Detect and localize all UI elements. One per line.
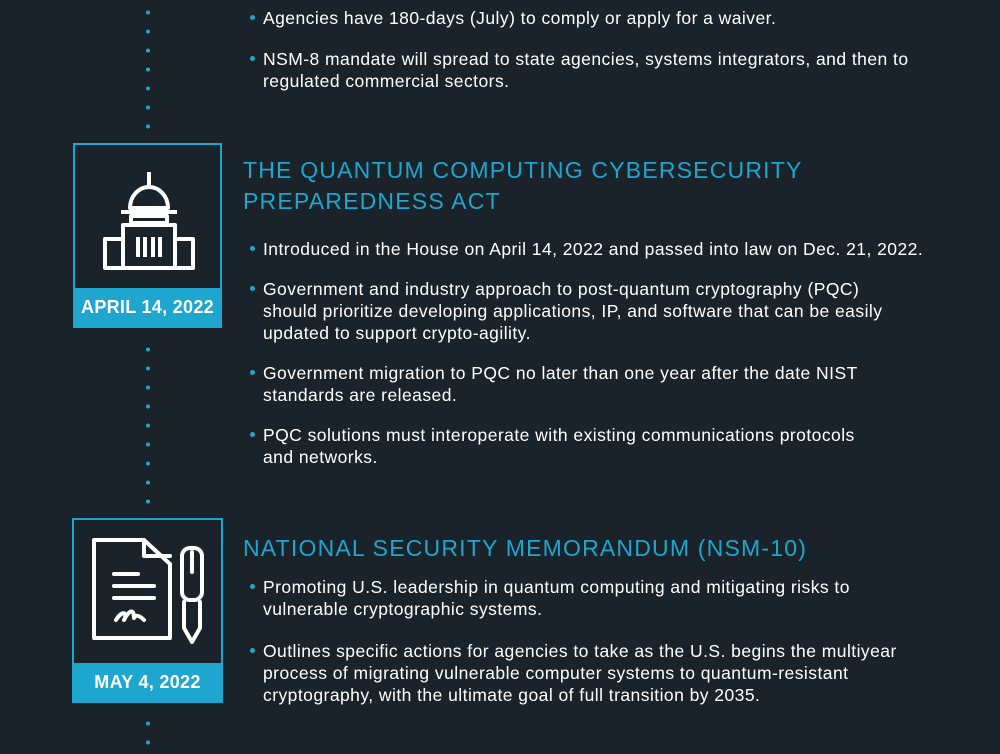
bullet: interoperate bbox=[250, 424, 855, 468]
bullet: outlines: Outlines specific actions for agencies to take as the U.S. begins the multiyear bbox=[263, 641, 897, 661]
timeline dots bottom bbox=[146, 714, 150, 754]
bullet: outlines bbox=[250, 640, 897, 706]
bullet: interoperate: PQC solutions must interoperate with existing communications protocols bbox=[263, 425, 855, 445]
date box: April 14, 2022 bbox=[73, 143, 222, 328]
bullet: migration: Government migration to PQC no later than one year after the date NIST bbox=[263, 363, 858, 383]
bullet: NSM-8 spread: regulated commercial sectors. bbox=[263, 71, 509, 91]
bullet: NSM-8 spread bbox=[250, 48, 909, 92]
icon: document with pen bbox=[92, 538, 204, 644]
bullet: approach bbox=[250, 278, 882, 344]
heading: Quantum Computing Cybersecurity Preparedness Act bbox=[243, 157, 803, 214]
heading: NSM-10: NATIONAL SECURITY MEMORANDUM (NSM-10) bbox=[243, 535, 807, 561]
bullet: NSM-8 spread: NSM-8 mandate will spread to state agencies, systems integrators, and then to bbox=[263, 49, 909, 69]
heading: Quantum Computing Cybersecurity Preparedness Act: THE QUANTUM COMPUTING CYBERSECURITY bbox=[243, 157, 803, 183]
bullet: promoting: Promoting U.S. leadership in quantum computing and mitigating risks to bbox=[263, 577, 850, 597]
date box: May 4, 2022 bbox=[72, 518, 223, 703]
heading: Quantum Computing Cybersecurity Preparedness Act: PREPAREDNESS ACT bbox=[243, 188, 501, 214]
bullet: outlines: cryptography, with the ultimate goal of full transition by 2035. bbox=[263, 685, 760, 705]
bullet: interoperate: and networks. bbox=[263, 447, 378, 467]
bullet: 180 days: Agencies have 180-days (July) to comply or apply for a waiver. bbox=[263, 8, 776, 28]
bullet: approach: updated to support crypto-agility. bbox=[263, 323, 531, 343]
bullet: migration bbox=[250, 362, 858, 406]
bullet: migration: standards are released. bbox=[263, 385, 457, 405]
bullet: approach: should prioritize developing applications, IP, and software that can be easily bbox=[263, 301, 882, 321]
bullet: approach: Government and industry approach to post-quantum cryptography (PQC) bbox=[263, 279, 859, 299]
timeline dots middle bbox=[146, 340, 150, 508]
icon: capitol building bbox=[103, 172, 195, 270]
bullet: introduced: Introduced in the House on April 14, 2022 and passed into law on Dec. 21, 2022. bbox=[263, 239, 923, 259]
date box: May 4, 2022: MAY 4, 2022 bbox=[94, 672, 201, 692]
bullet: outlines: process of migrating vulnerable computer systems to quantum-resistant bbox=[263, 663, 848, 683]
bullet: promoting: vulnerable cryptographic systems. bbox=[263, 599, 542, 619]
date box: April 14, 2022: APRIL 14, 2022 bbox=[81, 297, 214, 317]
timeline dots top bbox=[146, 3, 150, 131]
bullet: promoting bbox=[250, 576, 850, 620]
